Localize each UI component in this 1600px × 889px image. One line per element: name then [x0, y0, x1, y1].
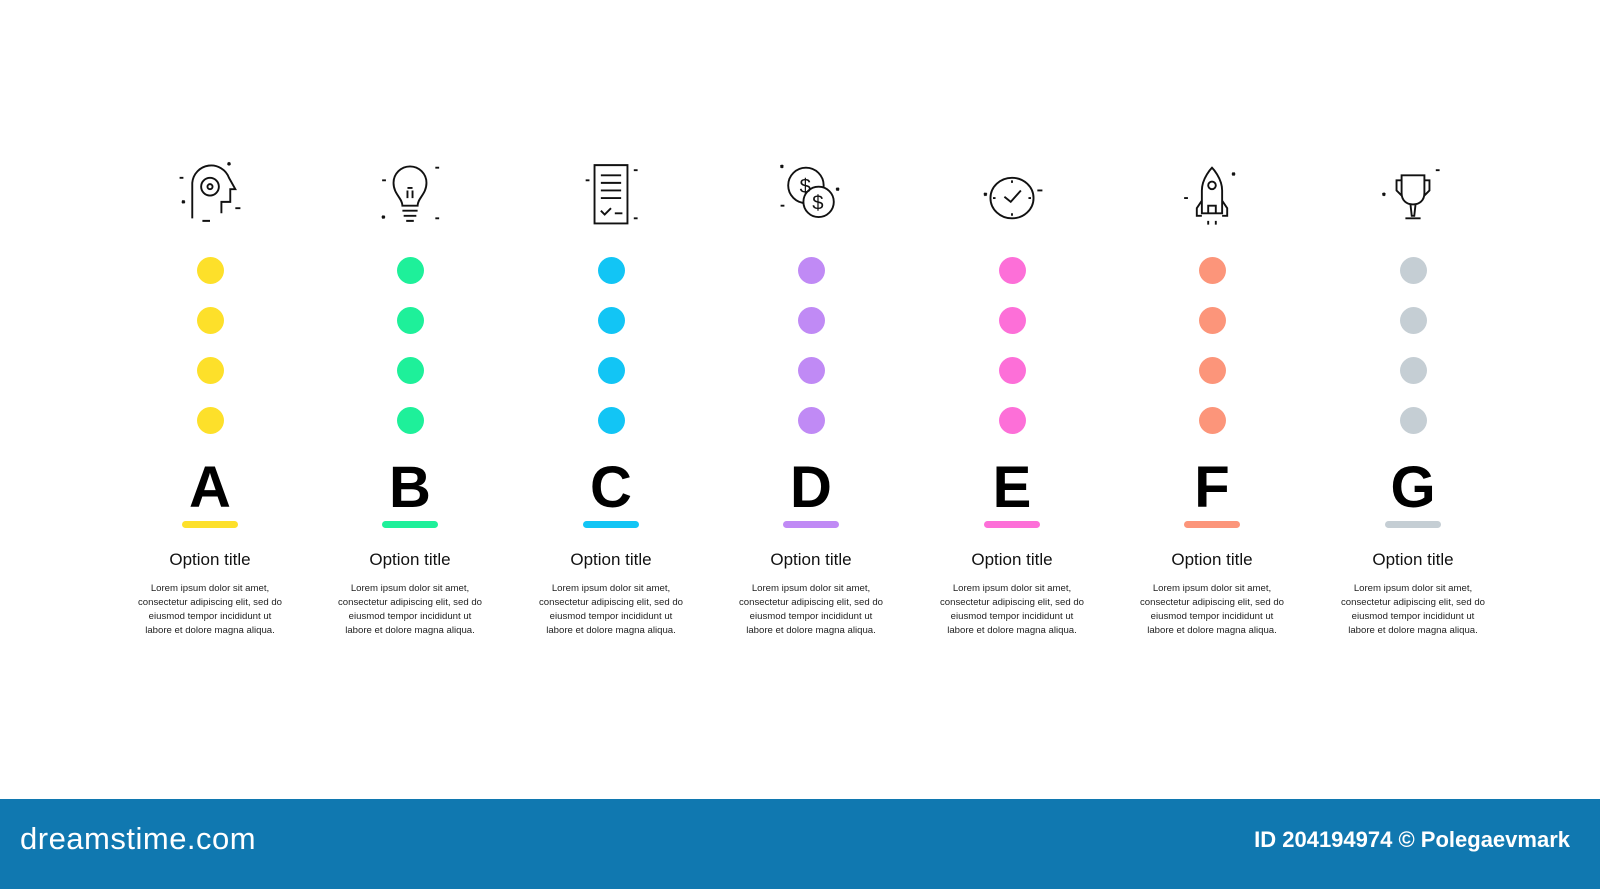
letter F: F	[1194, 455, 1230, 520]
icon: head with gear	[180, 162, 240, 222]
body text	[739, 583, 883, 636]
option title: Option title	[770, 550, 852, 569]
body text: eiusmod tempor incididunt ut	[750, 611, 872, 622]
underline	[182, 521, 238, 528]
option title: Option title	[369, 550, 451, 569]
icon: clock	[984, 176, 1042, 220]
body text: eiusmod tempor incididunt ut	[1352, 611, 1474, 622]
column C	[539, 164, 683, 636]
option title: Option title	[570, 550, 652, 569]
column F	[1140, 166, 1284, 636]
body text: labore et dolore magna aliqua.	[1147, 625, 1277, 636]
letter D: D	[790, 455, 832, 520]
letter G: G	[1390, 455, 1436, 520]
letter C: C	[590, 455, 632, 520]
body text: eiusmod tempor incididunt ut	[550, 611, 672, 622]
body text: labore et dolore magna aliqua.	[1348, 625, 1478, 636]
column E	[940, 176, 1084, 636]
body text: labore et dolore magna aliqua.	[746, 625, 876, 636]
dots	[1199, 257, 1226, 434]
body text: Lorem ipsum dolor sit amet,	[1153, 583, 1271, 594]
underline	[583, 521, 639, 528]
dots	[598, 257, 625, 434]
dots	[798, 257, 825, 434]
column G	[1341, 169, 1485, 636]
footer credit: ID 204194974 © Polegaevmark	[1254, 827, 1570, 852]
body text	[1140, 583, 1284, 636]
column D	[739, 164, 883, 636]
body text: labore et dolore magna aliqua.	[947, 625, 1077, 636]
option title: Option title	[1171, 550, 1253, 569]
body text: Lorem ipsum dolor sit amet,	[351, 583, 469, 594]
column A	[138, 162, 282, 636]
icon: coins: $	[800, 176, 811, 198]
body text: consectetur adipiscing elit, sed do	[539, 597, 683, 608]
body text: consectetur adipiscing elit, sed do	[338, 597, 482, 608]
body text: consectetur adipiscing elit, sed do	[138, 597, 282, 608]
footer logo: dreamstime.com	[20, 821, 256, 856]
body text	[940, 583, 1084, 636]
body text: Lorem ipsum dolor sit amet,	[151, 583, 269, 594]
letter A: A	[189, 455, 231, 520]
body text: eiusmod tempor incididunt ut	[349, 611, 471, 622]
dots	[1400, 257, 1427, 434]
letter E: E	[993, 455, 1031, 520]
option title: Option title	[169, 550, 251, 569]
body text: labore et dolore magna aliqua.	[546, 625, 676, 636]
body text: eiusmod tempor incididunt ut	[149, 611, 271, 622]
body text: Lorem ipsum dolor sit amet,	[752, 583, 870, 594]
body text	[138, 583, 282, 636]
icon: coins	[780, 164, 840, 218]
icon: trophy	[1382, 169, 1440, 220]
icon: light bulb	[382, 166, 440, 222]
underline	[1184, 521, 1240, 528]
body text: Lorem ipsum dolor sit amet,	[953, 583, 1071, 594]
body text: Lorem ipsum dolor sit amet,	[1354, 583, 1472, 594]
icon: document	[586, 164, 638, 224]
option title: Option title	[971, 550, 1053, 569]
underline	[382, 521, 438, 528]
body text: Lorem ipsum dolor sit amet,	[552, 583, 670, 594]
icon: coins: $	[812, 192, 824, 214]
body text	[1341, 583, 1485, 636]
dots	[197, 257, 224, 434]
body text: labore et dolore magna aliqua.	[145, 625, 275, 636]
letter B: B	[389, 455, 431, 520]
underline	[1385, 521, 1441, 528]
body text	[539, 583, 683, 636]
dots	[397, 257, 424, 434]
body text: consectetur adipiscing elit, sed do	[1341, 597, 1485, 608]
underline	[984, 521, 1040, 528]
column B	[338, 166, 482, 636]
footer bar	[0, 799, 1600, 889]
body text: consectetur adipiscing elit, sed do	[739, 597, 883, 608]
body text: eiusmod tempor incididunt ut	[1151, 611, 1273, 622]
dots	[999, 257, 1026, 434]
body text	[338, 583, 482, 636]
body text: consectetur adipiscing elit, sed do	[1140, 597, 1284, 608]
underline	[783, 521, 839, 528]
icon: rocket	[1184, 166, 1236, 225]
body text: consectetur adipiscing elit, sed do	[940, 597, 1084, 608]
body text: labore et dolore magna aliqua.	[345, 625, 475, 636]
body text: eiusmod tempor incididunt ut	[951, 611, 1073, 622]
option title: Option title	[1372, 550, 1454, 569]
